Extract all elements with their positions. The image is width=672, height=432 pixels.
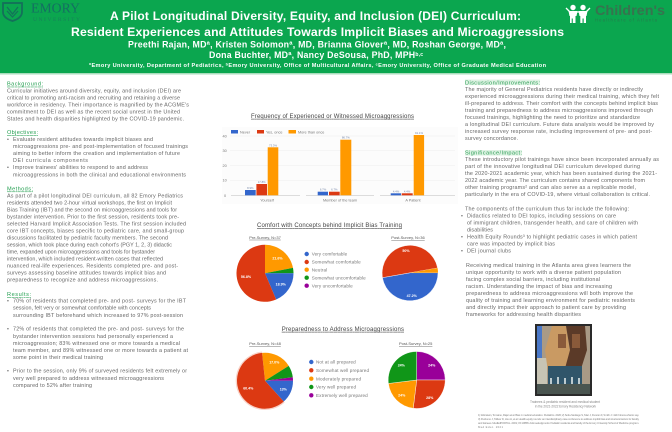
panel: methods: session, which took place during each cohort's (PGY 1, 2, 3) didactic xyxy=(7,243,172,249)
pie legend: comfort xyxy=(304,252,366,288)
panel: methods: selected Harvard Implicit Association Tests. The first session included xyxy=(7,222,186,228)
references xyxy=(478,413,640,429)
panel: methods: time, expanded upon microaggressions and tools for bystander xyxy=(7,250,155,256)
pie chart: preparedness pre-survey: 13% xyxy=(280,387,288,391)
authors: Dona Buchter, MDª, Nancy DeSousa, PhD, MPH xyxy=(209,50,415,60)
y axis labels xyxy=(222,134,227,198)
panel: methods: residents attended two 2-hour virtual workshops, the first on Implicit xyxy=(7,201,172,207)
panel: significance and impact: other training programs² and can also serve as a replicable model, xyxy=(465,185,636,191)
pie chart: comfort pre-survey xyxy=(236,235,294,302)
panel: curriculum components: care was impacted by implicit bias xyxy=(467,242,555,248)
panel: curriculum components xyxy=(461,206,638,255)
pie legend: preparedness: Not at all prepared xyxy=(316,360,356,365)
pie chart: preparedness pre-survey xyxy=(237,341,293,409)
panel: background: States and health disparities highlighted by the COVID-19 pandemic. xyxy=(7,116,184,122)
pie chart: comfort pre-survey: Pre-Survey, N=37 xyxy=(249,235,282,240)
panel: methods: Bias Training (IBT) and the second on microaggressions and tools for xyxy=(7,208,177,214)
title xyxy=(71,9,564,39)
y axis labels: 40 xyxy=(222,134,227,138)
panel: atlanta context: facing complex social barriers, including institutional xyxy=(466,277,600,283)
pie chart: preparedness pre-survey: 60.4% xyxy=(243,386,254,390)
panel: atlanta context: unique opportunity to work with a diverse patient population xyxy=(466,270,621,276)
panel: objectives: • xyxy=(7,165,9,171)
pie chart: preparedness post-survey: 28% xyxy=(426,396,434,400)
panel: significance and impact: These introductory pilot trainings have since been incorporated annually as xyxy=(465,157,659,163)
legend: Yes, once xyxy=(266,130,283,134)
panel: discussion and improvements: experienced microaggressions during their medical training, which they felt xyxy=(465,94,660,100)
panel: atlanta context: quality of training and learning environment for pediatric residents xyxy=(466,298,635,304)
bars: yourself: 17.8% xyxy=(258,180,266,184)
x axis labels: Yourself xyxy=(260,198,275,202)
panel: discussion and improvements: The majority of General Pediatrics residents have directly or indirectly xyxy=(465,87,643,93)
panel: atlanta context: racism. Understanding the impact of bias and increasing xyxy=(466,284,612,290)
panel: significance and impact: part of the innovative longitudinal DEI curriculum developed during xyxy=(465,164,640,170)
authors xyxy=(128,40,506,60)
affiliations: ªEmory University, Department of Pediatrics, ᵇEmory University, Office of Multicultural Affairs, ᶜEmory University, Office of Graduate Medical Education xyxy=(89,62,547,69)
heading: significance xyxy=(465,150,522,156)
panel: background xyxy=(6,82,189,122)
y axis labels: 0 xyxy=(224,194,226,198)
pie chart: comfort post-survey: Post-Survey, N=36 xyxy=(391,235,425,240)
pie chart: preparedness post-survey: 24% xyxy=(398,394,406,398)
panel: curriculum components: The components of the curriculum thus far include the following: xyxy=(465,206,629,212)
bars: a patient: 4.4% xyxy=(393,189,400,193)
pie chart: preparedness post-survey: Post-Survey, N=25 xyxy=(399,341,433,346)
panel: atlanta context: Receiving medical training in the Atlanta area gives learners the xyxy=(466,263,631,269)
panel: results: surrounding IBT beforehand which increased to 97% post-session xyxy=(13,313,183,319)
pie chart: comfort post-survey: 47.2% xyxy=(407,294,418,298)
logo: Children's Healthcare of Atlanta xyxy=(566,3,665,23)
bars: member of the team: 6.7% xyxy=(320,188,327,192)
panel: curriculum components: Health Equity Rounds³ to highlight pediatric cases in which patient xyxy=(467,235,638,241)
title: A Pilot Longitudinal Diversity, Equity, and Inclusion (DEI) Curriculum: xyxy=(110,9,521,23)
panel: discussion and improvements: ill-prepared to address. Their comfort with the concepts behind implicit bias xyxy=(465,101,658,107)
panel: discussion and improvements: training and preparedness to address microaggressions improved through xyxy=(465,108,653,114)
panel: objectives: Evaluate resident attitudes towards implicit biases and xyxy=(13,137,153,143)
logo: Emory University: EMORY xyxy=(31,0,80,16)
panel: results: Prior to the session, only 9% of surveyed residents felt extremely or xyxy=(13,369,187,375)
pie chart: preparedness pre-survey: 17.0% xyxy=(269,360,280,364)
panel: curriculum components: Didactics related to DEI topics, including sessions on care xyxy=(467,213,616,219)
panel: objectives: Improve trainees' abilities to respond to and address xyxy=(13,165,148,171)
image caption xyxy=(530,400,600,408)
pie legend: comfort: Somewhat comfortable xyxy=(312,260,361,265)
panel: discussion and improvements xyxy=(465,80,660,142)
pie legend: preparedness xyxy=(309,360,369,398)
references: 3) Perdomo J, Tolliver D, Hsu H, et al. Health equity rounds: an interdisciplinary case conference to address implicit bias and structural racism for faculty xyxy=(478,417,640,421)
panel: background: workforce in residency. Their importance is magnified by the ACGME's xyxy=(6,102,189,108)
pie legend: comfort: Very comfortable xyxy=(312,252,348,257)
panel: methods: bystander intervention. Prior to the first session, residents took pre- xyxy=(7,215,179,221)
bars: yourself: 73.3% xyxy=(269,143,277,147)
artwork image xyxy=(535,324,592,396)
panel: objectives xyxy=(7,130,188,178)
panel: curriculum components: • xyxy=(461,249,463,255)
pie chart: comfort pre-survey: 18.9% xyxy=(276,283,287,287)
pie chart: comfort post-survey: 50% xyxy=(402,249,410,253)
panel: objectives: microaggressions in both the clinical and educational environments xyxy=(13,172,186,178)
panel: results: • xyxy=(7,369,9,375)
references: and trainees. MedEdPORTAL. 2019; 15:10858. Acknowledgments: Pediatric residents and faculty of the Emory University School of Medicine program. xyxy=(478,421,639,425)
pie chart: comfort pre-survey: 21.6% xyxy=(272,256,283,260)
y axis labels: 10 xyxy=(222,179,227,183)
panel: methods: surveys assessing baseline attitudes towards implicit bias and xyxy=(7,271,166,277)
bars: yourself: 8.9% xyxy=(247,186,254,190)
panel: results: microaggression; 83% witnessed one or more towards a medical xyxy=(13,341,180,347)
panel: results: session, felt very or somewhat comfortable with concepts xyxy=(13,306,151,312)
panel: atlanta context: and directly impact their approach to patient care by providing xyxy=(466,305,626,311)
panel: curriculum components: • xyxy=(461,213,463,219)
panel: results: 72% of residents that completed the pre- and post- surveys for the xyxy=(13,327,184,333)
panel: results: very well prepared to address witnessed microaggressions xyxy=(13,376,164,382)
panel: background: critical to promoting anti-racism and recruiting and retaining a diverse xyxy=(7,95,180,101)
panel: results: team member, and 89% witnessed one or more towards a patient at xyxy=(13,348,188,354)
panel: discussion and improvements: a longitudinal DEI curriculum. Future data analysis would be improved by xyxy=(465,122,654,128)
pie chart: preparedness post-survey: 24% xyxy=(428,364,436,368)
pie legend: preparedness: Very well prepared xyxy=(316,385,356,390)
y axis labels: 20 xyxy=(222,164,227,168)
panel: significance and impact: 2022 academic year. The curriculum contains shared components from xyxy=(465,178,646,184)
pie legend: comfort: Somewhat uncomfortable xyxy=(312,275,366,280)
authors: Preethi Rajan, MDª, Kristen Solomonª, MD, Brianna Gloverª, MD, Roshan George, MDª, xyxy=(128,40,506,50)
panel: curriculum components: DEI journal clubs xyxy=(467,249,511,255)
panel: discussion and improvements: survey concordance. xyxy=(465,136,518,142)
bars: member of the team: 86.7% xyxy=(342,136,350,140)
panel: methods: core IBT concepts, biases specific to pediatric care, and small-group xyxy=(7,229,184,235)
logo: Children's Healthcare of Atlanta: Children's xyxy=(595,3,665,18)
panel: methods: nuanced real-life experiences. Residents completed pre- and post- xyxy=(7,264,178,270)
heading: objectives: Objectives: xyxy=(7,130,38,136)
pie legend: preparedness: Moderately prepared xyxy=(316,376,361,381)
panel: curriculum components: disabilities xyxy=(467,228,493,234)
panel: objectives: DEI curricula components xyxy=(13,158,88,164)
panel: methods: preparedness to recognize and address microaggressions. xyxy=(7,278,158,284)
panel: results: some point in their medical training xyxy=(13,355,103,361)
pie chart: preparedness pre-survey: Pre-Survey, N=48 xyxy=(249,341,282,346)
chart heading: microaggressions frequency: Frequency of Experienced or Witnessed Microaggressions xyxy=(251,114,414,120)
references: 1) Weinstein, Tomaino, Rajan et al. Bias in medical education. Pediatrics. 2020; 2) Sotto-Santiago S, Mac J, Duncan F, Smith J. I didn't know what to say. xyxy=(478,413,639,417)
legend xyxy=(231,130,324,134)
panel: results: • xyxy=(7,299,9,305)
chart heading: comfort with concepts: Comfort with Concepts behind Implicit Bias Training xyxy=(257,223,402,229)
panel: significance and impact: Significance/Impact: xyxy=(465,151,522,157)
header banner xyxy=(0,0,672,74)
panel: significance and impact: particularly in the era of COVID-19, where virtual collaboration is critical. xyxy=(465,192,650,198)
panel: methods: discussions facilitated by pediatric faculty members. The second xyxy=(7,236,168,242)
logo: Children's Healthcare of Atlanta: Healthcare of Atlanta xyxy=(595,18,658,22)
panel: atlanta context: preparedness to address microaggressions will both improve the xyxy=(466,291,633,297)
x axis labels: Member of the team xyxy=(323,198,357,202)
panel: objectives: aiming to better inform the creation and implementation of future xyxy=(13,151,180,157)
pie chart: preparedness post-survey xyxy=(388,341,445,409)
panel: objectives: • xyxy=(7,137,9,143)
panel: background: commitment to DEI as well as the recent social unrest in the United xyxy=(7,109,180,115)
panel: results: compared to 52% after training xyxy=(13,383,92,389)
bars: a patient: 91.1% xyxy=(415,131,423,135)
pie legend: comfort: Very uncomfortable xyxy=(312,283,353,288)
bars: a patient xyxy=(391,131,424,195)
pie chart: comfort pre-survey: 56.8% xyxy=(241,275,252,279)
bars: a patient: 4.4% xyxy=(404,189,411,193)
panel: curriculum components: of immigrant children, transgender health, and care of children with xyxy=(467,220,638,226)
heading: methods: Methods: xyxy=(7,186,33,192)
x axis labels: A Patient xyxy=(405,198,422,202)
x axis labels xyxy=(260,198,422,202)
pie legend: comfort: Neutral xyxy=(312,267,327,272)
logo: Emory University: UNIVERSITY xyxy=(33,17,80,23)
pie legend: preparedness: Somewhat well prepared xyxy=(316,368,369,373)
title: Resident Experiences and Attitudes Towards Implicit Biases and Microaggressions xyxy=(71,25,564,39)
panel: methods xyxy=(7,186,186,284)
panel: background: Curricular initiatives around diversity, equity, and inclusion (DEI) are xyxy=(7,88,181,94)
legend: More than once xyxy=(298,130,324,134)
panel: discussion and improvements: increased survey response rate, including improvement of pre- and post- xyxy=(465,129,652,135)
panel: atlanta context: frameworks for addressing health disparities xyxy=(466,312,581,318)
heading: background: Background: xyxy=(7,82,43,88)
pie chart: preparedness post-survey: 24% xyxy=(398,364,406,368)
image caption: in the 2021-2022 Emory Residency Network xyxy=(535,404,596,408)
panel: results xyxy=(7,292,188,389)
logo: Emory University xyxy=(3,0,80,23)
panel: methods: As part of a pilot longitudinal DEI curriculum, all 82 Emory Pediatrics xyxy=(7,194,183,200)
image caption: Trainees & pediatric resident and medical student xyxy=(530,400,600,404)
panel: objectives: microaggressions pre- and post-implementation of focused trainings xyxy=(13,144,188,150)
panel: curriculum components: • xyxy=(461,235,463,241)
bars: member of the team xyxy=(318,136,351,195)
chart heading: preparedness: Preparedness to Address Microaggressions xyxy=(282,327,404,333)
panel: results: 70% of residents that completed pre- and post- surveys for the IBT xyxy=(13,299,187,305)
panel: discussion and improvements: focused trainings, highlighting the need to prioritize and standardize xyxy=(465,115,640,121)
pie chart: comfort post-survey xyxy=(382,235,438,301)
bars: yourself xyxy=(245,143,278,195)
panel: significance and impact: the 2020-2021 academic year, which has been sustained during the 2021- xyxy=(465,171,657,177)
y axis labels: 30 xyxy=(222,149,227,153)
panel: results: • xyxy=(7,327,9,333)
bars: member of the team: 6.7% xyxy=(331,188,338,192)
authors: b,c xyxy=(415,52,423,58)
panel: results: bystander intervention sessions had personally experienced a xyxy=(13,334,173,340)
heading: results: Results: xyxy=(7,292,31,298)
bar chart: microaggression frequency xyxy=(222,127,458,204)
panel: atlanta context xyxy=(466,263,635,318)
panel: discussion and improvements: Discussion/Improvements: xyxy=(465,80,540,86)
panel: significance and impact xyxy=(465,150,659,198)
heading: discussion xyxy=(465,80,540,85)
pie legend: preparedness: Extremely well prepared xyxy=(316,393,368,398)
legend: Never xyxy=(240,130,251,134)
references: Med Educ. 2021 xyxy=(478,425,503,429)
panel: methods: intervention, which included resident-written cases that reflected xyxy=(7,257,163,263)
